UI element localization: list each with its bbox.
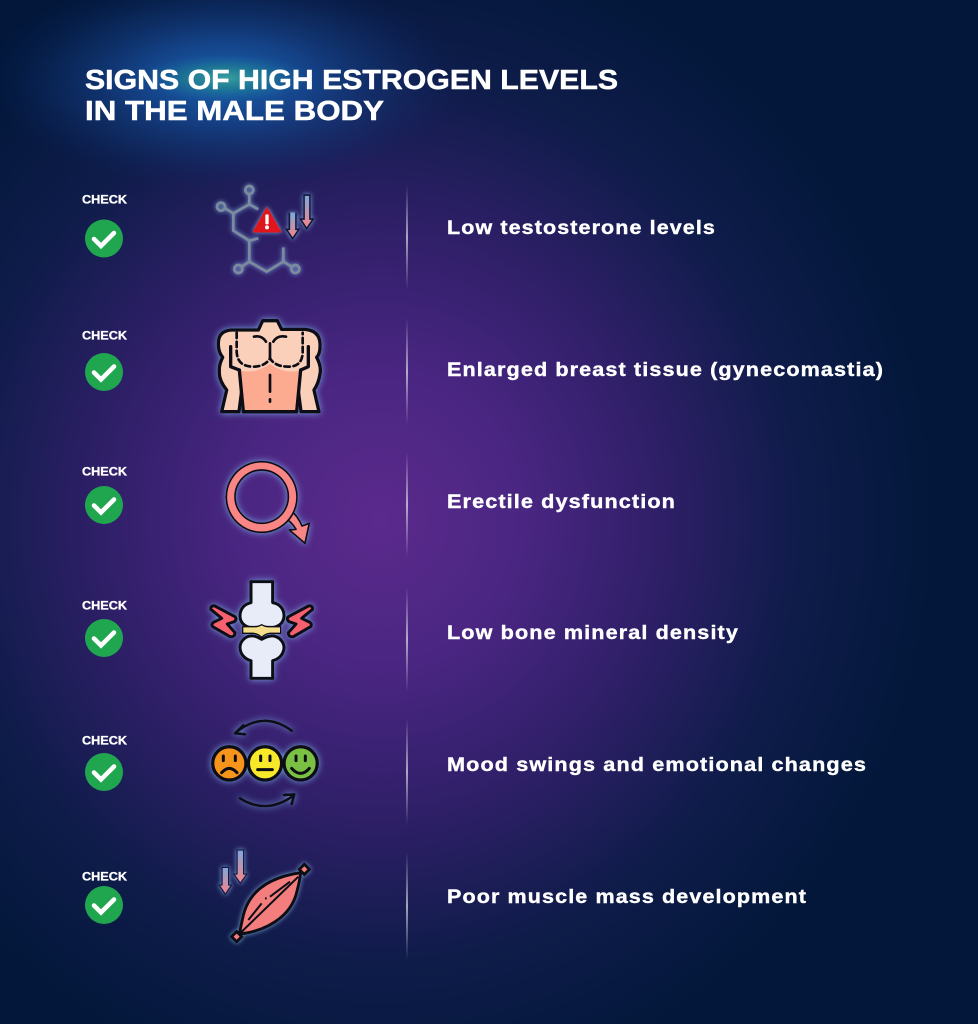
row: low bone mineral density (82, 582, 739, 692)
label: Low testosterone levels (447, 217, 716, 239)
check badge (82, 466, 128, 524)
label: Erectile dysfunction (447, 491, 676, 513)
row: enlarged breast tissue (82, 318, 884, 425)
check badge: CHECK (82, 600, 128, 612)
check badge: CHECK (82, 330, 128, 342)
check badge (82, 872, 128, 924)
title (85, 64, 618, 126)
row: low testosterone levels (82, 185, 716, 290)
icon: molecule with warning and down arrows (217, 186, 313, 273)
title: SIGNS OF HIGH ESTROGEN LEVELS (85, 64, 618, 95)
divider (406, 318, 408, 425)
icon: male chest (218, 321, 320, 412)
icon: knee joint with pain bolts (211, 582, 313, 678)
divider (406, 718, 408, 825)
row: poor muscle mass (82, 850, 807, 960)
check badge: CHECK (82, 194, 128, 206)
icon: male symbol pointing down (226, 462, 309, 543)
icon: muscle with down arrows (219, 850, 310, 942)
label: Enlarged breast tissue (gynecomastia) (447, 359, 884, 381)
row: erectile dysfunction (82, 452, 676, 557)
check badge: CHECK (82, 736, 128, 748)
check badge (82, 736, 128, 791)
label: Poor muscle mass development (447, 886, 807, 908)
label: Mood swings and emotional changes (447, 754, 867, 776)
title: IN THE MALE BODY (85, 95, 384, 126)
row: mood swings (82, 718, 867, 825)
check badge (82, 600, 128, 657)
divider (406, 452, 408, 557)
check badge (82, 330, 128, 391)
divider (406, 185, 408, 290)
check badge (82, 194, 128, 258)
divider (406, 587, 408, 692)
icon: mood faces with cycle arrows (213, 721, 317, 806)
check badge: CHECK (82, 466, 128, 478)
divider (406, 852, 408, 960)
check badge: CHECK (82, 872, 128, 884)
label: Low bone mineral density (447, 622, 739, 644)
